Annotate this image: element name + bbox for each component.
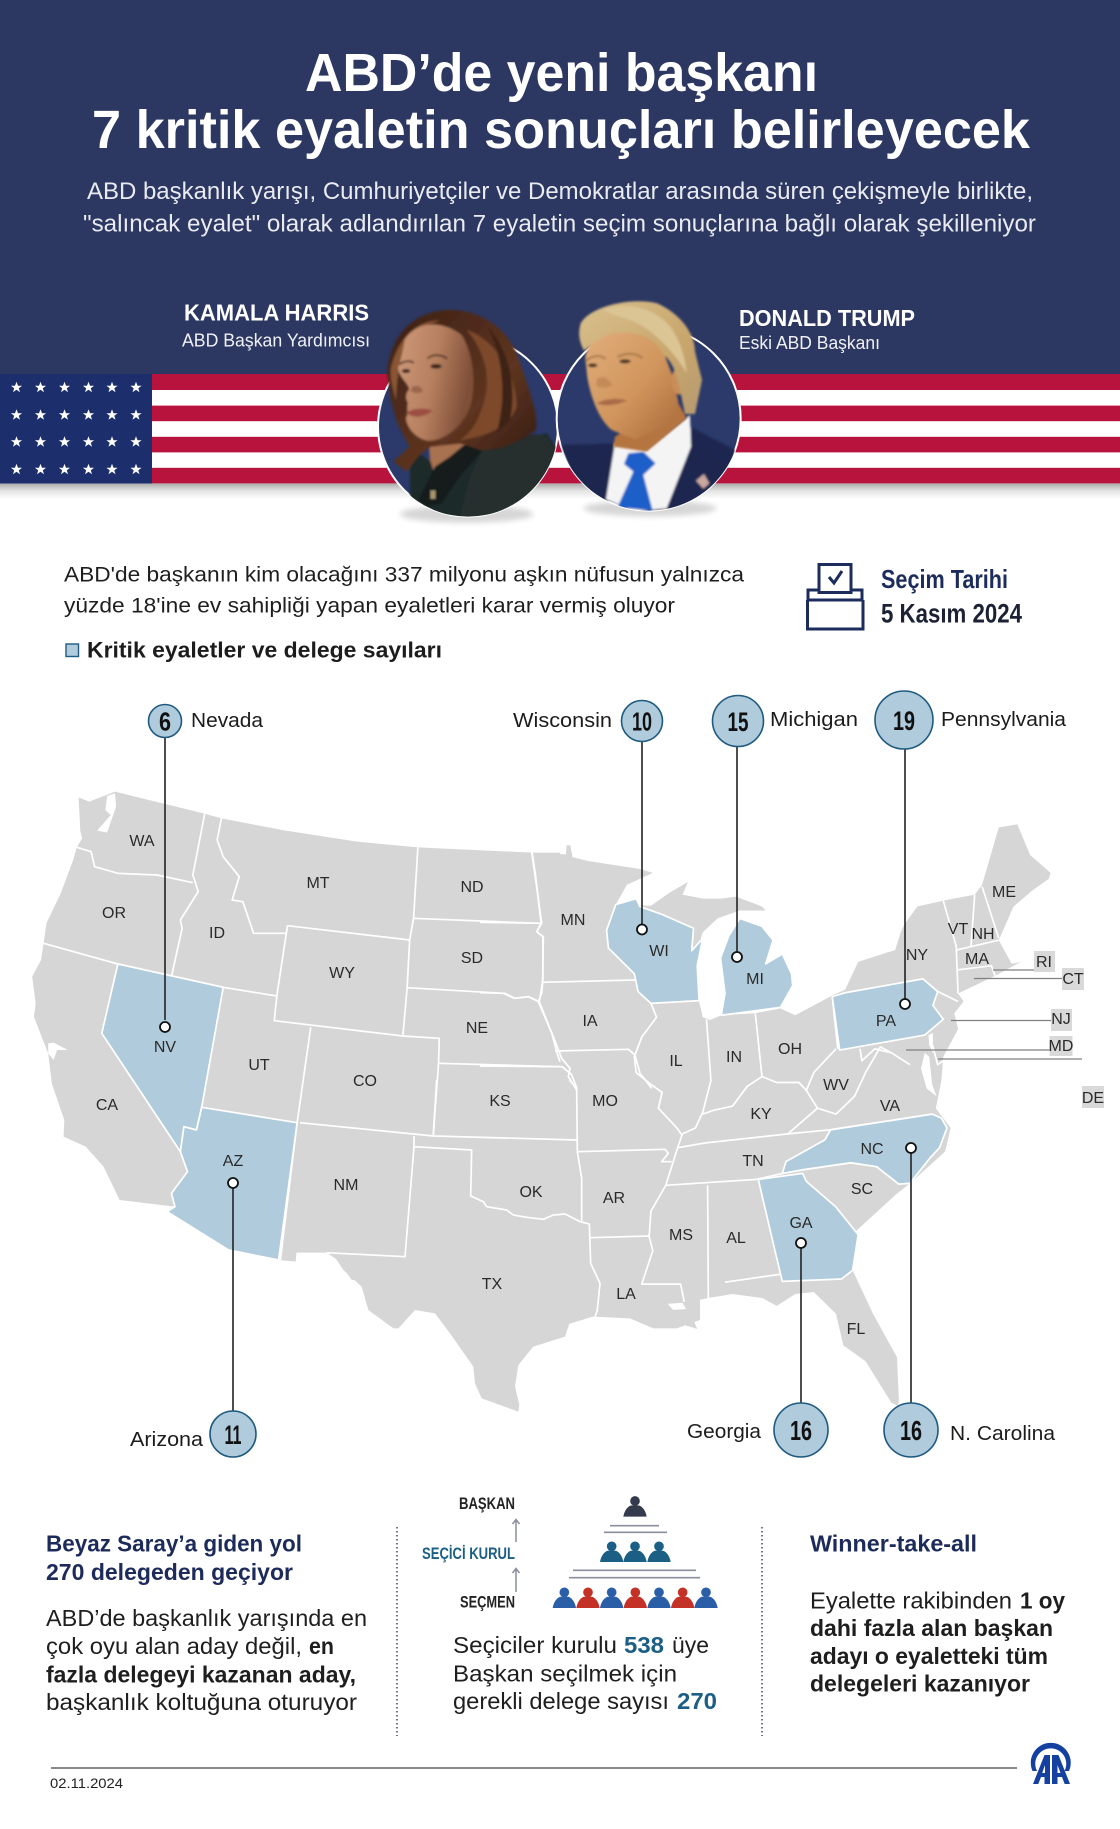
state abbreviations: NJ (1051, 1011, 1071, 1028)
state abbreviations: ND (460, 879, 484, 896)
state abbreviations: WY (329, 965, 355, 982)
map: United States (32, 792, 1104, 1412)
panel: winner take all: 1 oy (1020, 1587, 1065, 1613)
pin: Pennsylvania 19: Pennsylvania (941, 709, 1067, 731)
pin: Wisconsin 10: Wisconsin (513, 710, 612, 732)
panel: winner take all: Eyalette rakibinden (810, 1587, 1012, 1613)
state abbreviations: OK (519, 1184, 543, 1201)
pyramid labels: SEÇMEN (460, 1592, 515, 1612)
pyramid labels: BAŞKAN (459, 1494, 515, 1513)
election date (881, 564, 1022, 628)
pin: Nevada 6 (148, 704, 264, 1032)
state abbreviations: PA (876, 1013, 896, 1030)
pyramid arrows (512, 1520, 520, 1592)
state abbreviations: DE (1082, 1090, 1104, 1107)
state abbreviations: MO (592, 1093, 618, 1110)
state abbreviations: VA (880, 1098, 900, 1115)
pin: Michigan 15: Michigan (770, 709, 858, 731)
election date: 5 Kasım 2024 (881, 598, 1022, 628)
state abbreviations: OH (778, 1041, 802, 1058)
pyramid labels: SEÇİCİ KURUL (422, 1544, 515, 1563)
small state labels with leader lines (906, 951, 1104, 1108)
state abbreviations: NH (971, 926, 995, 943)
date: 02.11.2024 (50, 1775, 123, 1791)
highlighted states: Wisconsin, Michigan, Pennsylvania, North Carolina, Georgia (607, 899, 947, 1281)
state abbreviations: NC (860, 1141, 884, 1158)
state abbreviations: MI (746, 971, 764, 988)
candidate name: Donald Trump (739, 305, 915, 353)
title (92, 43, 1031, 160)
state abbreviations: NE (466, 1020, 488, 1037)
pin: Michigan 15: 15 (728, 707, 748, 737)
state abbreviations: KY (750, 1106, 772, 1123)
portrait: Kamala Harris (378, 310, 558, 523)
state abbreviations: CA (96, 1097, 118, 1114)
state abbreviations: WA (129, 833, 155, 850)
panel: winner take all: adayı o eyaletteki tüm (810, 1643, 1048, 1669)
state abbreviations: CT (1062, 971, 1084, 988)
panel: road to the White House: başkanlık koltuğuna oturuyor (46, 1689, 357, 1715)
state abbreviations: MN (561, 912, 585, 929)
state abbreviations: RI (1036, 954, 1052, 971)
footer line (51, 1767, 1017, 1769)
state abbreviations: SC (851, 1181, 873, 1198)
state abbreviations (96, 833, 1104, 1338)
panel: road to the White House: çok oyu alan aday değil, (46, 1633, 302, 1659)
panel: winner take all: dahi fazla alan başkan (810, 1615, 1053, 1641)
pin: Nevada 6: Nevada (191, 710, 264, 732)
subtitle: ABD başkanlık yarışı, Cumhuriyetçiler ve Demokratlar arasında süren çekişmeyle birlikte, (87, 178, 1033, 205)
pin: North Carolina 16 (884, 1143, 1056, 1457)
state borders (44, 814, 999, 1317)
state abbreviations: ID (209, 925, 225, 942)
state abbreviations: VT (948, 921, 968, 938)
pin: Arizona 11 (130, 1178, 256, 1457)
pyramid labels (422, 1494, 515, 1612)
electoral college text: 270 (677, 1688, 717, 1714)
state abbreviations: LA (616, 1286, 636, 1303)
state abbreviations: IL (669, 1053, 683, 1070)
american flag band (0, 374, 1120, 484)
candidate name: Kamala Harris: KAMALA HARRIS (184, 300, 369, 326)
state abbreviations: MA (965, 951, 989, 968)
panel: winner take all: delegeleri kazanıyor (810, 1671, 1030, 1697)
electoral college text: gerekli delege sayısı (453, 1688, 669, 1714)
pyramid people icons (553, 1496, 718, 1608)
state abbreviations: AZ (223, 1153, 243, 1170)
state abbreviations: AL (726, 1230, 746, 1247)
electoral college text: 538 (624, 1632, 664, 1658)
pin: North Carolina 16: N. Carolina (950, 1423, 1056, 1445)
panel: winner take all (810, 1530, 1065, 1697)
candidate name: Donald Trump: Eski ABD Başkanı (739, 333, 880, 353)
panel: road to the White House: Beyaz Saray’a giden yol (46, 1530, 302, 1556)
divider left (396, 1527, 398, 1736)
electoral college text (453, 1632, 717, 1714)
state abbreviations: ME (992, 884, 1016, 901)
state abbreviations: MD (1049, 1038, 1073, 1055)
pin: Pennsylvania 19 (875, 691, 1067, 1009)
icon: ballot box (808, 564, 863, 629)
panel: road to the White House (46, 1530, 367, 1715)
intro text: ABD'de başkanın kim olacağını 337 milyonu aşkın nüfusun yalnızca (64, 564, 744, 586)
pin: Michigan 15 (712, 696, 858, 962)
panel: electoral college pyramid (422, 1494, 718, 1714)
pin: Georgia 16 (687, 1238, 828, 1457)
pyramid separators (569, 1526, 700, 1578)
state abbreviations: UT (248, 1057, 270, 1074)
state abbreviations: IN (726, 1049, 742, 1066)
title: 7 kritik eyaletin sonuçları belirleyecek (92, 100, 1031, 160)
legend: Kritik eyaletler ve delege sayıları (87, 638, 442, 662)
pin: Wisconsin 10 (513, 700, 662, 934)
state abbreviations: TN (742, 1153, 764, 1170)
pin: Arizona 11: Arizona (130, 1429, 204, 1451)
electoral college text: üye (672, 1632, 709, 1658)
panel: road to the White House: ABD’de başkanlık yarışında en (46, 1605, 367, 1631)
state abbreviations: WI (649, 943, 669, 960)
election date: Seçim Tarihi (881, 564, 1008, 594)
state abbreviations: FL (847, 1321, 865, 1338)
subtitle: "salıncak eyalet" olarak adlandırılan 7 eyaletin seçim sonuçlarına bağlı olarak şekilleniyor (83, 210, 1036, 238)
intro text (64, 564, 744, 618)
pin: Georgia 16: Georgia (687, 1421, 762, 1443)
state abbreviations: OR (102, 905, 126, 922)
pin: Arizona 11: 11 (224, 1420, 242, 1450)
state abbreviations: NM (334, 1177, 358, 1194)
state abbreviations: IA (582, 1013, 598, 1030)
panel: winner take all: Winner-take-all (810, 1530, 977, 1556)
state abbreviations: AR (603, 1190, 625, 1207)
pin: Pennsylvania 19: 19 (893, 706, 915, 736)
divider right (761, 1527, 763, 1736)
pin: Nevada 6: 6 (159, 706, 171, 736)
state abbreviations: GA (789, 1215, 813, 1232)
state abbreviations: NY (906, 947, 928, 964)
state abbreviations: CO (353, 1073, 377, 1090)
candidate name: Donald Trump: DONALD TRUMP (739, 305, 915, 331)
state abbreviations: SD (461, 950, 483, 967)
pin: Wisconsin 10: 10 (632, 706, 652, 736)
intro text: yüzde 18'ine ev sahipliği yapan eyaletleri karar vermiş oluyor (64, 594, 675, 618)
pin: North Carolina 16: 16 (900, 1415, 922, 1446)
title: ABD’de yeni başkanı (305, 43, 818, 103)
electoral college text: Seçiciler kurulu (453, 1632, 617, 1658)
subtitle (83, 178, 1036, 238)
header background (0, 0, 1120, 376)
state abbreviations: MT (306, 875, 330, 892)
electoral college text: Başkan seçilmek için (453, 1660, 677, 1686)
state abbreviations: MS (669, 1227, 693, 1244)
candidate name: Kamala Harris (182, 300, 370, 351)
pin: Georgia 16: 16 (790, 1415, 812, 1446)
panel: road to the White House: fazla delegeyi kazanan aday, (46, 1662, 356, 1688)
state abbreviations: WV (823, 1077, 849, 1094)
highlighted states: Nevada and Arizona (102, 964, 297, 1260)
candidate name: Kamala Harris: ABD Başkan Yardımcısı (182, 331, 370, 351)
flag shadow (0, 483, 1120, 499)
icon: AA logo (1031, 1743, 1071, 1784)
portrait: Donald Trump (557, 301, 741, 517)
state abbreviations: NV (154, 1039, 176, 1056)
panel: road to the White House: en (309, 1633, 334, 1659)
state abbreviations: TX (482, 1276, 503, 1293)
state abbreviations: KS (489, 1093, 511, 1110)
panel: road to the White House: 270 delegeden geçiyor (46, 1559, 293, 1585)
